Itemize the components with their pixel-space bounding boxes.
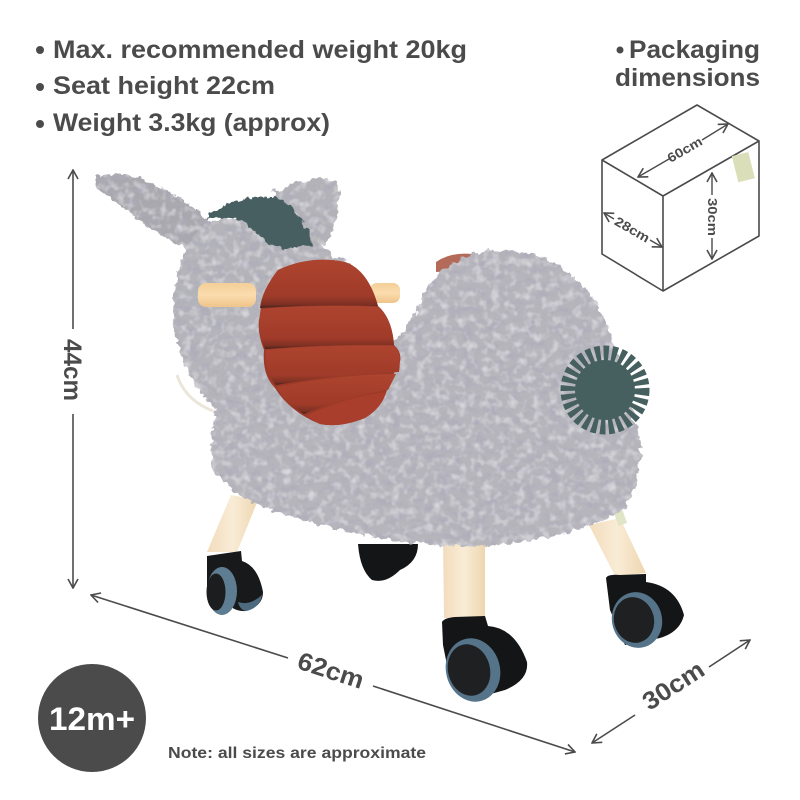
bullet: weight: Weight 3.3kg (approx) [53, 109, 330, 137]
wooden legs [207, 495, 646, 618]
rear left caster [206, 551, 263, 615]
seat back peek [436, 254, 472, 272]
arrow: box width 28cm [604, 213, 662, 247]
right ear [274, 179, 338, 246]
note: Note: all sizes are approximate [168, 745, 426, 762]
saddle band 1 [260, 260, 378, 308]
arrow: box width 28cm: 28cm [612, 214, 652, 246]
rear middle wheel [358, 544, 418, 581]
left ear [96, 174, 208, 252]
muzzle edge [177, 375, 213, 411]
arrow: box length 60cm: 60cm [665, 134, 705, 166]
length dimension 62cm [91, 595, 575, 752]
ride-on donkey toy [96, 174, 684, 708]
front caster [439, 616, 527, 708]
packaging heading: dimensions [615, 64, 760, 92]
saddle band 3 [266, 346, 400, 385]
handlebar right [370, 283, 400, 303]
specification list [36, 36, 467, 137]
mane [209, 197, 313, 248]
box label sticker [732, 152, 755, 182]
saddle band 2 [259, 306, 394, 349]
head [173, 218, 340, 420]
handlebar left [198, 283, 256, 307]
arrow: box height 30cm: 30cm [705, 198, 720, 236]
tail pompom [569, 354, 641, 426]
width dimension 30cm: 30cm [637, 656, 710, 716]
body [211, 250, 640, 546]
width dimension 30cm [592, 640, 750, 743]
age badge [38, 664, 146, 772]
packaging box diagram [602, 105, 759, 291]
length dimension 62cm: 62cm [294, 647, 367, 695]
bullet: seat height: Seat height 22cm [53, 72, 275, 100]
height dimension 44cm: 44cm [58, 339, 86, 401]
care tag [614, 510, 627, 526]
arrow: box height 30cm [705, 173, 720, 259]
bullet: max weight: Max. recommended weight 20kg [53, 36, 467, 64]
saddle band 4 [277, 374, 396, 414]
age badge: 12m+ [49, 701, 135, 737]
saddle band 5 [306, 392, 386, 425]
packaging heading [615, 36, 760, 92]
leather saddle [259, 260, 400, 425]
arrow: box length 60cm [638, 124, 728, 177]
packaging heading: Packaging [629, 36, 760, 64]
right caster [606, 574, 684, 654]
